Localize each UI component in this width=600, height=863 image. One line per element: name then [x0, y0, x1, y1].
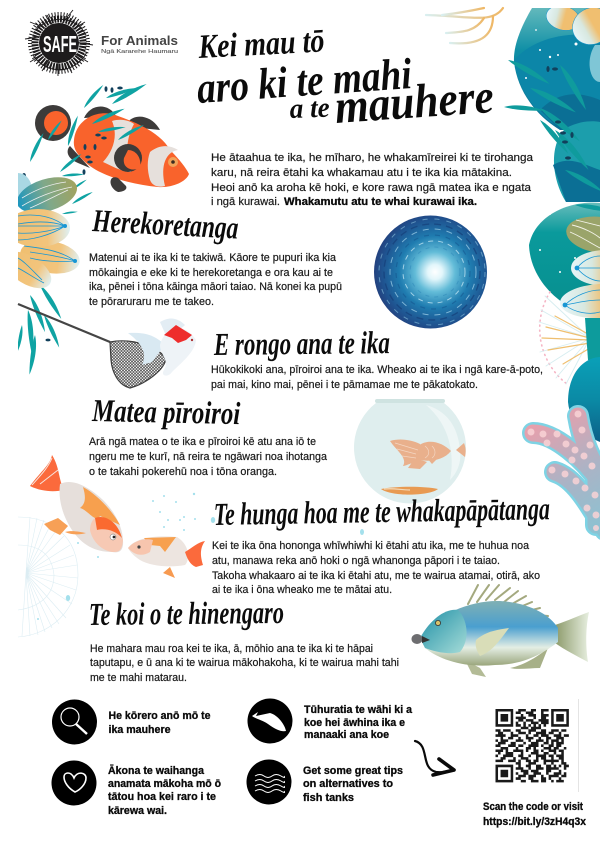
divider [578, 699, 579, 792]
text: scan the code: https://bit.ly/3zH4q3x [483, 816, 586, 828]
intro paragraph: Whakamutu atu te whai kurawai ika. [284, 196, 477, 208]
text: Ākona [108, 765, 221, 817]
decoration: right side ocean artwork [504, 0, 600, 531]
text: Te koi body: He mahara mau roa kei te ika, ā, mōhio ana te ika ki te hāpai [90, 643, 373, 655]
title: aro ki te mahi [195, 49, 414, 113]
text: Get tips [303, 765, 403, 804]
link: waves [246, 760, 403, 804]
goldfish in net [128, 318, 196, 376]
text: He kōrero [108, 710, 210, 736]
text: Ākona: anamata mākoha mō ō [108, 778, 221, 790]
intro paragraph: karu, nā reira ētahi ka whakamau atu i te ika kia mātakina. [211, 167, 512, 179]
body [420, 601, 558, 666]
gravel [381, 487, 438, 495]
clownfish [35, 105, 189, 192]
blob: blue bottom [568, 357, 600, 442]
dorsal fin [468, 585, 548, 616]
text: Ākona: tātou hoa kei raro i te [108, 791, 216, 803]
text: Matea body: Arā ngā matea o te ika e pīroiroi kē atu ana iō te [89, 436, 316, 448]
text: scan the code: Scan the code or visit [483, 801, 583, 813]
text: Herekoretanga body: Matenui ai te ika ki te takiwā. Kāore te pupuri ika kia [89, 252, 336, 264]
title: a te [289, 93, 330, 125]
text: Herekoretanga body [89, 252, 342, 308]
icon: magnifier [52, 700, 97, 744]
icon: waves [246, 760, 292, 804]
decoration: left foliage and pods [0, 81, 189, 637]
coral: dots [528, 410, 600, 531]
buds: right branch [546, 66, 574, 160]
head [420, 610, 467, 653]
coral: pink fingers [533, 416, 600, 530]
text: Herekoretanga body: mōkaingia e eke ki te herekoretanga e ora kau ai te [89, 267, 333, 279]
text: Tūhuratia [304, 704, 413, 741]
text: Ākona: Ākona te waihanga [108, 765, 205, 777]
title: Kei mau tō [197, 22, 325, 66]
buds: left branch [22, 86, 123, 341]
title: mauhere [333, 70, 495, 134]
leaves: right branch [504, 57, 600, 213]
fin: bottom rear [510, 648, 548, 669]
text: He kōrero: ika mauhere [108, 724, 170, 736]
bowl [354, 403, 466, 503]
text: Te hunga body: Takoha whakaaro ai te ika ki ētahi atu, me te wairua atamai, otirā, ako [212, 570, 540, 582]
water bubbles [152, 493, 364, 535]
logo subtitle: Ngā Kararehe Haumaru [101, 49, 178, 55]
arrow to QR [415, 741, 454, 775]
fan: yellow coral [539, 292, 590, 384]
illustration: small koi [128, 536, 205, 578]
text: Te hunga body: ai te ika i ōna wheako me te mātai atu. [212, 584, 392, 596]
illustration: swirling fish school [374, 216, 487, 328]
pod: yellow lower [20, 242, 80, 274]
text: Te koi body: taputapu, e ū ana ki te wairua mākohakoha, ki te wairua mahi tahi [90, 657, 399, 669]
goldfish [390, 440, 466, 469]
pods: top [546, 8, 600, 82]
text: Matea body [89, 436, 327, 478]
blob: lower [529, 203, 600, 302]
text: He kōrero: He kōrero anō mō te [108, 710, 210, 722]
text: Get tips: Get some great tips [303, 765, 403, 777]
fan: jellyfish lines [18, 517, 78, 637]
net with goldfish [18, 304, 196, 388]
pod veins [18, 215, 75, 283]
link: magnifier [52, 700, 210, 744]
illustration: fishbowl [354, 399, 466, 503]
decoration: top yellow branches [426, 8, 503, 43]
heading: Matea pīroiroi: Matea pīroiroi [91, 392, 241, 431]
water droplets [37, 542, 99, 620]
text: Ākona: kārewa wai. [108, 805, 167, 817]
pod: yellow lower [560, 284, 600, 318]
pectoral fin [476, 628, 509, 656]
heading: Herekoretanga: Herekoretanga [91, 202, 239, 246]
text: Matea body: ngeru me te kurī, nā reira te ngāwari noa ihotanga [89, 451, 327, 463]
pod: yellow upper [571, 250, 600, 286]
intro paragraph: Heoi anō ka aroha kē hoki, e kore rawa ngā matea ika e ngata [211, 182, 531, 194]
QR code [496, 699, 579, 792]
pod: light blue [18, 173, 32, 207]
logo word SAFE: SAFE [43, 31, 77, 57]
net handle [18, 304, 110, 342]
text: Matea body: o te takahi pokerehū noa i tōna oranga. [89, 466, 277, 478]
fin: bottom front [465, 660, 486, 677]
body [60, 482, 123, 552]
pod: olive [566, 216, 600, 252]
pod: green [18, 177, 77, 211]
fins [44, 518, 68, 535]
link: whale [248, 698, 413, 744]
text: Herekoretanga body: ika, pēnei i tōna kāinga māori taiao. Nā konei ka pupū [89, 281, 342, 293]
pod: yellow upper [18, 209, 70, 246]
icon: nest [25, 10, 93, 76]
text: scan the code [483, 801, 586, 828]
icon: heart [52, 760, 96, 806]
text: E rongo body: Hūkokikoki ana, pīroiroi ana te ika. Wheako ai te ika i ngā kare-ā-poto, [211, 364, 543, 376]
net mesh [110, 341, 166, 388]
text: Tūhuratia: koe hei āwhina ika e [304, 717, 405, 729]
illustration: big koi [30, 455, 123, 552]
text: Get tips: on alternatives to [303, 778, 393, 790]
illustration: blue fish [412, 585, 589, 677]
white speckles [525, 29, 578, 273]
heading: E rongo ana te ika: E rongo ana te ika [213, 324, 390, 362]
intro paragraph: i ngā kurawai. [211, 196, 280, 208]
text: Te koi body [90, 643, 399, 684]
logo name: For Animals [101, 33, 178, 48]
logo: SAFE For Animals [25, 10, 178, 76]
text: Tūhuratia: manaaki ana koe [304, 729, 389, 741]
text: E rongo body: pai mai, kino mai, pēnei i te pāmamae me te pākatokato. [211, 379, 478, 391]
text: Tūhuratia: Tūhuratia te wāhi ki a [304, 704, 413, 716]
text: Te koi body: me te mahi matarau. [90, 672, 187, 684]
intro paragraph [211, 152, 533, 208]
column: teal [585, 318, 600, 360]
snout [412, 634, 422, 644]
eye [435, 620, 441, 626]
text: Herekoretanga body: te pōraruraru me te takeo. [89, 296, 214, 308]
pod: yellow bottom [18, 252, 52, 288]
blob: middle [554, 121, 600, 202]
tail [555, 612, 589, 662]
icon: whale [248, 698, 292, 744]
tail [30, 455, 64, 491]
title [195, 22, 495, 134]
text: Get tips: fish tanks [303, 792, 354, 804]
text: E rongo body [211, 364, 543, 391]
text: Te hunga body: atu, manawa reka anō hoki o ngā whanonga pāpori i te taiao. [212, 555, 500, 567]
text: Te hunga body [212, 540, 540, 596]
blob: top [514, 8, 600, 130]
leaves: left branch [16, 81, 147, 375]
intro paragraph: He ātaahua te ika, he mīharo, he whakamīreirei ki te tirohanga [211, 152, 533, 164]
heading: Te koi o te hinengaro: Te koi o te hinengaro [89, 594, 284, 632]
link: heart [52, 760, 221, 817]
text: Te hunga body: Kei te ika ōna hononga whīwhiwhi ki ētahi atu ika, me te huhua noa [212, 540, 529, 552]
